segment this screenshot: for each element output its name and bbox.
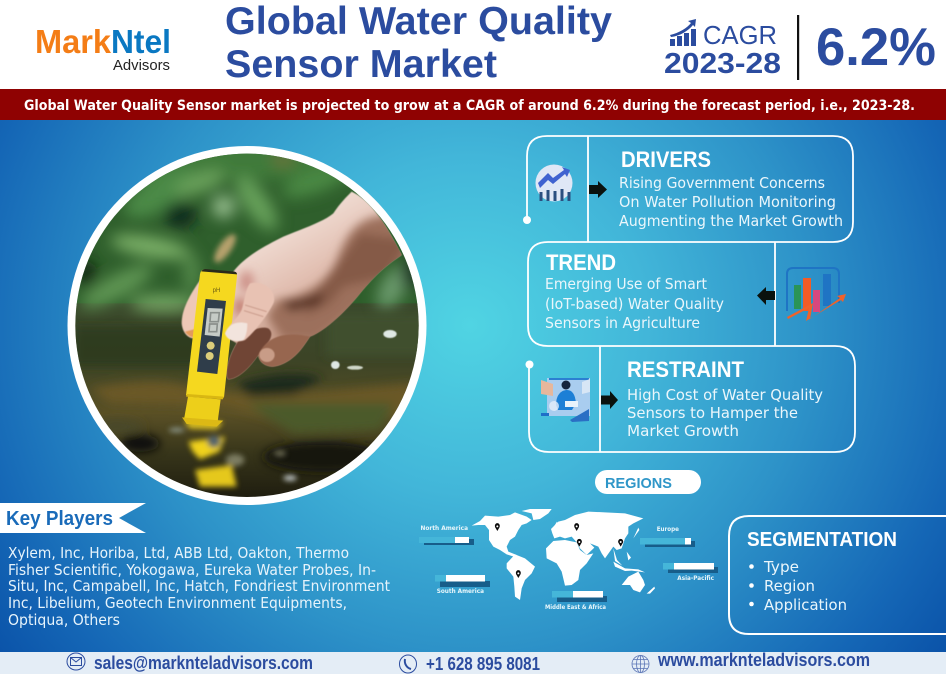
arrow: drivers <box>589 181 607 198</box>
text: drivers body: On Water Pollution Monitoring <box>619 193 836 211</box>
text: trend body: Emerging Use of Smart <box>545 275 707 293</box>
meter body: pH <box>213 288 220 294</box>
text: email: sales@marknteladvisors.com <box>94 653 313 673</box>
regions pill: REGIONS <box>605 475 672 492</box>
text: key players list: Inc, Libelium, Geotech Environment Equipments, <box>8 594 347 612</box>
world map with regional bars <box>419 509 718 611</box>
regions pill <box>595 470 701 494</box>
footer contact bar <box>0 650 946 674</box>
CAGR block <box>664 15 936 80</box>
reflection of meter <box>184 420 223 429</box>
arrow: trend <box>757 287 775 305</box>
arrow: restraint <box>601 391 618 409</box>
text: trend body <box>545 275 724 332</box>
logo: MarkNtel Advisors: Ntel <box>111 23 171 60</box>
text: trend body: Sensors in Agriculture <box>545 314 700 332</box>
heading: restraint: RESTRAINT <box>627 357 745 382</box>
icon: email <box>67 653 85 670</box>
map continents <box>472 509 655 600</box>
heading: drivers: DRIVERS <box>621 147 711 172</box>
CAGR block: 2023-28 <box>664 48 781 80</box>
red summary banner <box>0 89 946 120</box>
list: segments: Application <box>764 596 847 614</box>
icon: drivers growth globe <box>536 164 572 202</box>
logo: MarkNtel Advisors: Mark <box>35 23 112 60</box>
text: restraint body: Sensors to Hamper the <box>627 404 798 422</box>
text: restraint body: High Cost of Water Quality <box>627 386 823 404</box>
meter body <box>182 269 237 427</box>
text: key players list <box>8 544 390 629</box>
key players ribbon: Key Players <box>6 508 113 530</box>
logo: MarkNtel Advisors <box>35 23 171 74</box>
list: segments: Type <box>763 558 799 576</box>
text: key players list: Xylem, Inc, Horiba, Ltd, ABB Ltd, Oakton, Thermo <box>8 544 349 562</box>
text: website: www.marknteladvisors.com <box>657 650 870 670</box>
bar: Europe <box>640 525 695 547</box>
bar: Europe: Europe <box>657 525 680 533</box>
text: drivers body <box>619 174 843 230</box>
circular photo: hand dipping pH meter in water <box>60 140 430 505</box>
hand in photo <box>182 192 413 379</box>
text: restraint body <box>627 386 823 440</box>
list: segments: Region <box>764 577 815 595</box>
bar: Asia-Pacific: Asia-Pacific <box>677 574 714 582</box>
title: Sensor Market <box>225 43 497 86</box>
list: segments <box>749 558 847 614</box>
bar: Middle East and Africa <box>545 591 607 611</box>
title: Global Water Quality <box>225 0 612 43</box>
panel: trend <box>528 242 846 346</box>
lower fingers <box>227 328 271 379</box>
icon: globe <box>632 656 649 672</box>
icon: restraint analyst <box>541 378 590 422</box>
main gradient background <box>0 120 946 652</box>
CAGR block: 6.2% <box>816 18 936 77</box>
heading: trend: TREND <box>546 250 616 275</box>
key players ribbon <box>0 503 146 533</box>
heading: segmentation: SEGMENTATION <box>747 529 897 551</box>
panel: segmentation <box>729 516 946 634</box>
text: key players list: Situ, Inc, Campabell, Inc, Hatch, Fondriest Environment <box>8 577 390 595</box>
bar: Asia-Pacific <box>663 563 718 582</box>
text: phone: +1 628 895 8081 <box>426 654 540 674</box>
icon: growth chart <box>670 19 696 46</box>
logo: MarkNtel Advisors: Advisors <box>113 57 170 74</box>
text: key players list: Optiqua, Others <box>8 611 120 629</box>
text: restraint body: Market Growth <box>627 422 739 440</box>
bar: North America <box>419 524 474 545</box>
text: trend body: (IoT-based) Water Quality <box>545 295 724 313</box>
CAGR block: CAGR <box>703 20 777 50</box>
bar: South America: South America <box>437 587 484 595</box>
bar: Middle East and Africa: Middle East & Africa <box>545 603 606 611</box>
thumb behind meter <box>180 280 200 339</box>
bar: North America: North America <box>420 524 468 532</box>
bar: South America <box>435 575 490 595</box>
icon: trend bar chart <box>787 268 846 321</box>
panel: drivers <box>523 136 853 242</box>
panel: restraint <box>526 346 855 452</box>
index finger over meter <box>225 283 274 341</box>
icon: phone <box>400 655 416 673</box>
text: drivers body: Augmenting the Market Growth <box>619 212 843 230</box>
text: drivers body: Rising Government Concerns <box>619 174 825 192</box>
text: key players list: Fisher Scientific, Yokogawa, Eureka Water Probes, In- <box>8 561 376 579</box>
title <box>225 0 612 86</box>
shaded wrist and palm <box>267 213 413 340</box>
